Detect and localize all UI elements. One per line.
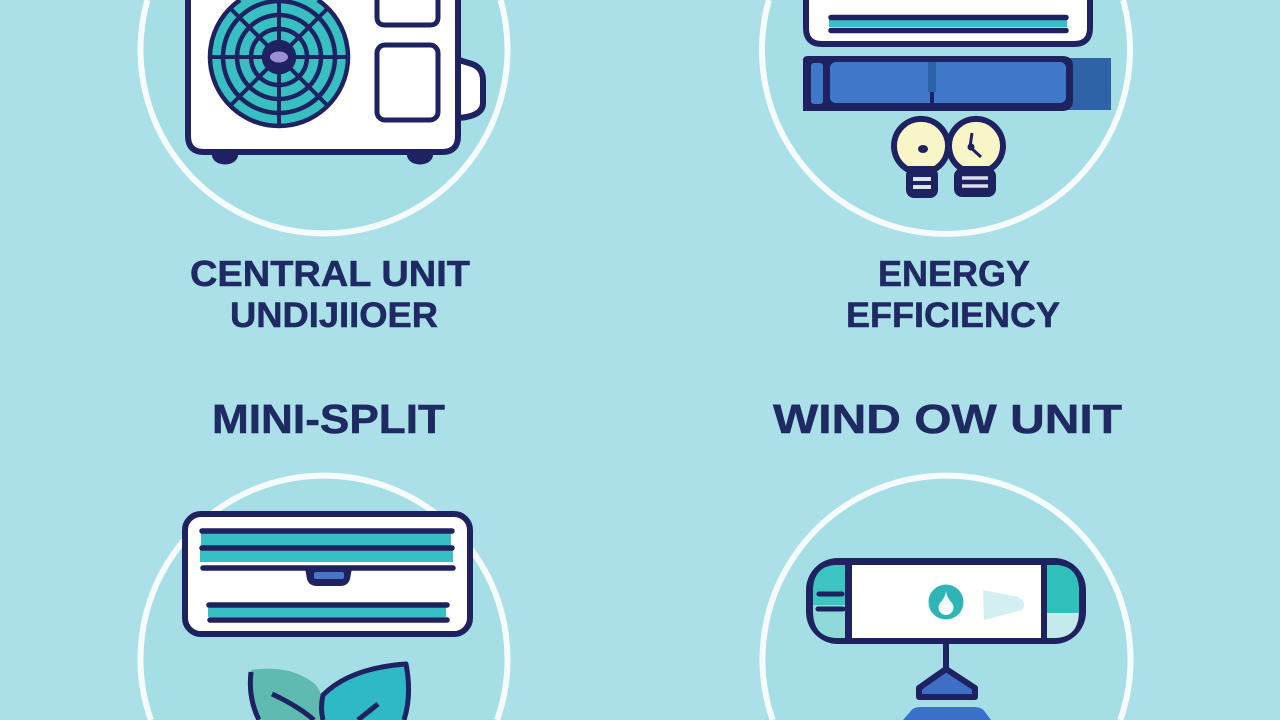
panel: mini-split	[140, 476, 508, 720]
heading: mini-split: MINI-SPLIT	[212, 396, 445, 442]
icon ring: window unit	[763, 476, 1130, 720]
heading: energy efficiency	[846, 253, 1060, 335]
panel: window unit	[763, 476, 1130, 720]
icon: vent	[305, 568, 352, 586]
icon: light bulb	[894, 119, 948, 195]
icon: water drop	[928, 584, 964, 620]
icon: window unit body	[806, 558, 1086, 644]
heading: central unit: UNDIJIIOER	[230, 296, 438, 335]
icon: indoor unit	[806, 0, 1090, 44]
heading: window unit: WIND OW UNIT	[773, 396, 1122, 442]
heading: energy efficiency: EFFICIENCY	[846, 296, 1060, 335]
icon: clock bulb	[949, 119, 1003, 194]
icon ring: central unit	[140, 0, 508, 233]
panel: energy efficiency	[762, 0, 1130, 234]
icon: wall unit	[185, 514, 470, 634]
icon: outdoor condenser unit	[188, 0, 483, 164]
heading: central unit	[190, 253, 470, 335]
icon ring: mini-split	[140, 476, 508, 720]
icon: fan grille	[210, 0, 348, 126]
icon: airflow cone	[983, 590, 1024, 620]
icon: leaves	[250, 664, 409, 720]
heading: energy efficiency: ENERGY	[878, 253, 1030, 294]
heading: central unit: CENTRAL UNIT	[190, 253, 470, 294]
icon: blue bar	[803, 56, 1111, 111]
icon: window unit stand	[903, 644, 991, 720]
icon ring: energy efficiency	[762, 0, 1130, 234]
panel: central unit	[140, 0, 508, 233]
